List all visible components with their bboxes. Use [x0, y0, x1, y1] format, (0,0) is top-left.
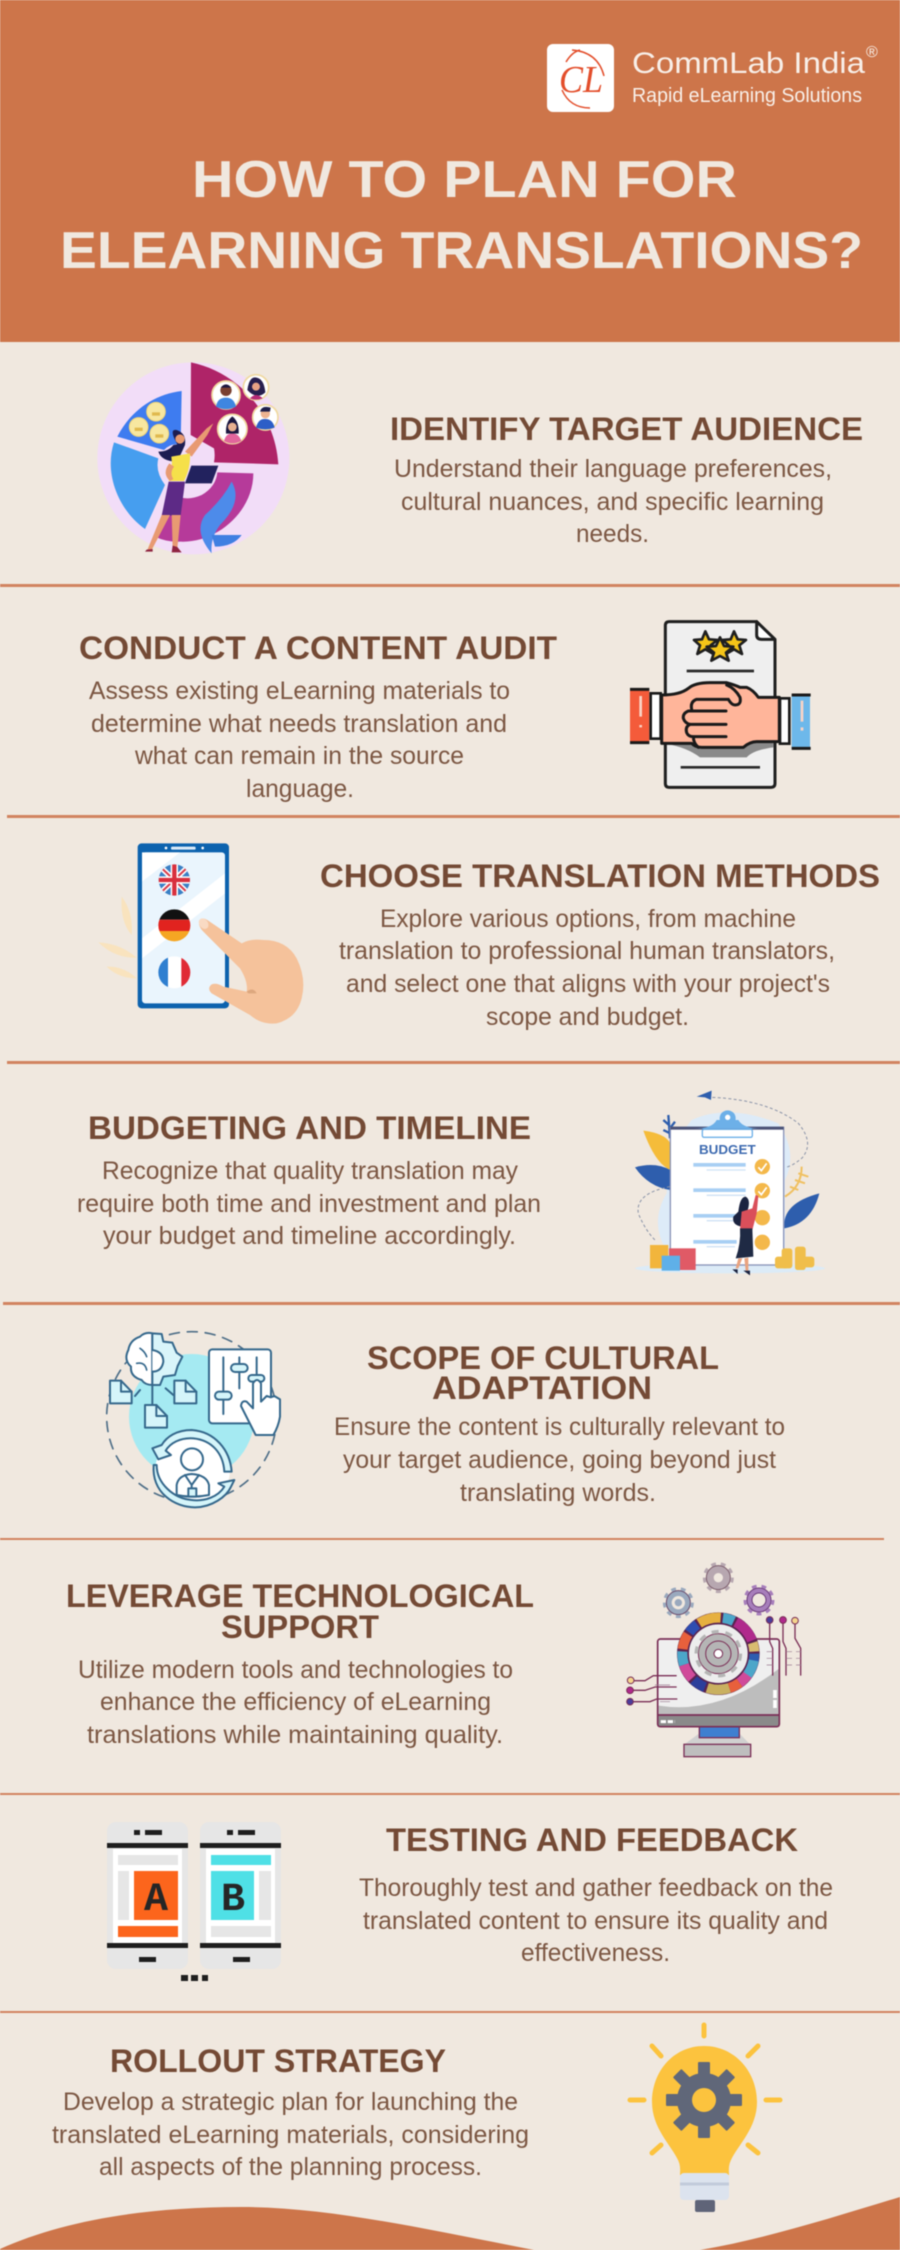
- logo: CL: [559, 59, 603, 101]
- logo: [547, 44, 878, 112]
- heading: ROLLOUT STRATEGY: [110, 2043, 446, 2079]
- heading: TESTING AND FEEDBACK: [386, 1822, 798, 1858]
- text block: Assess existing eLearning materials to: [89, 677, 510, 705]
- text block: translating words.: [460, 1479, 656, 1507]
- title: [60, 151, 863, 280]
- icon: adaptation cycle: [107, 1332, 280, 1507]
- text block: and select one that aligns with your project's: [346, 970, 830, 998]
- heading: SCOPE OF CULTURAL: [367, 1340, 719, 1376]
- text block: [359, 1874, 833, 1967]
- icon: A/B test phones: B: [221, 1878, 245, 1923]
- icon: computer with gears: [627, 1564, 802, 1757]
- panel: choose translation methods: [98, 843, 880, 1031]
- title: ELEARNING TRANSLATIONS?: [60, 222, 863, 280]
- text block: require both time and investment and plan: [77, 1190, 541, 1218]
- text block: your target audience, going beyond just: [343, 1446, 776, 1474]
- text block: Utilize modern tools and technologies to: [78, 1656, 513, 1684]
- text block: all aspects of the planning process.: [99, 2153, 482, 2181]
- text block: enhance the efficiency of eLearning: [100, 1688, 491, 1716]
- heading: CONDUCT A CONTENT AUDIT: [79, 630, 557, 666]
- text block: translated content to ensure its quality and: [363, 1907, 828, 1935]
- text block: language.: [246, 775, 354, 803]
- text block: [334, 1413, 785, 1507]
- text block: determine what needs translation and: [91, 710, 507, 738]
- panel: budgeting and timeline: [77, 1091, 825, 1275]
- heading: [367, 1340, 719, 1406]
- panel: leverage technological support: [66, 1564, 802, 1757]
- icon: light bulb with gear: [630, 2025, 780, 2212]
- text block: Recognize that quality translation may: [102, 1157, 518, 1185]
- heading: BUDGETING AND TIMELINE: [88, 1110, 531, 1146]
- text block: Develop a strategic plan for launching the: [63, 2088, 518, 2116]
- heading: LEVERAGE TECHNOLOGICAL: [66, 1578, 534, 1614]
- panel: identify target audience: [97, 362, 863, 554]
- panel: conduct a content audit: [79, 622, 811, 803]
- text block: translated eLearning materials, considering: [52, 2121, 529, 2149]
- icon: A/B test phones: A: [144, 1878, 168, 1923]
- text block: Understand their language preferences,: [394, 455, 832, 483]
- icon: phone with language flags: [98, 843, 303, 1024]
- panel: rollout strategy: [52, 2025, 780, 2212]
- heading: [66, 1578, 534, 1645]
- icon: handshake over document: [630, 622, 811, 787]
- text block: needs.: [576, 520, 649, 548]
- icon: budget clipboard: BUDGET: [699, 1142, 756, 1157]
- logo: ®: [866, 44, 878, 61]
- icon: budget clipboard: [635, 1091, 825, 1275]
- text block: translation to professional human translators,: [339, 937, 835, 965]
- text block: effectiveness.: [521, 1939, 670, 1967]
- text block: [89, 677, 510, 803]
- heading: ADAPTATION: [432, 1370, 652, 1406]
- text block: what can remain in the source: [134, 742, 464, 770]
- text block: scope and budget.: [486, 1003, 689, 1031]
- footer wave: [0, 2197, 900, 2250]
- text block: your budget and timeline accordingly.: [103, 1222, 516, 1250]
- heading: CHOOSE TRANSLATION METHODS: [320, 858, 880, 894]
- icon: A/B test phones: [107, 1822, 281, 1981]
- heading: SUPPORT: [221, 1609, 379, 1645]
- text block: [339, 905, 835, 1031]
- text block: [394, 455, 832, 548]
- text block: Explore various options, from machine: [380, 905, 796, 933]
- header band: [0, 0, 900, 342]
- logo: CommLab India: [632, 47, 865, 80]
- icon: audience pie chart with woman: [97, 362, 289, 554]
- text block: [78, 1656, 513, 1749]
- panel: testing and feedback: [107, 1822, 833, 1981]
- title: HOW TO PLAN FOR: [192, 151, 737, 209]
- panel: scope of cultural adaptation: [107, 1332, 785, 1507]
- text block: [77, 1157, 541, 1250]
- text block: cultural nuances, and specific learning: [401, 488, 824, 516]
- text block: [52, 2088, 529, 2181]
- text block: translations while maintaining quality.: [87, 1721, 503, 1749]
- text block: Thoroughly test and gather feedback on the: [359, 1874, 833, 1902]
- heading: IDENTIFY TARGET AUDIENCE: [390, 411, 863, 447]
- text block: Ensure the content is culturally relevant to: [334, 1413, 785, 1441]
- logo: Rapid eLearning Solutions: [632, 85, 862, 107]
